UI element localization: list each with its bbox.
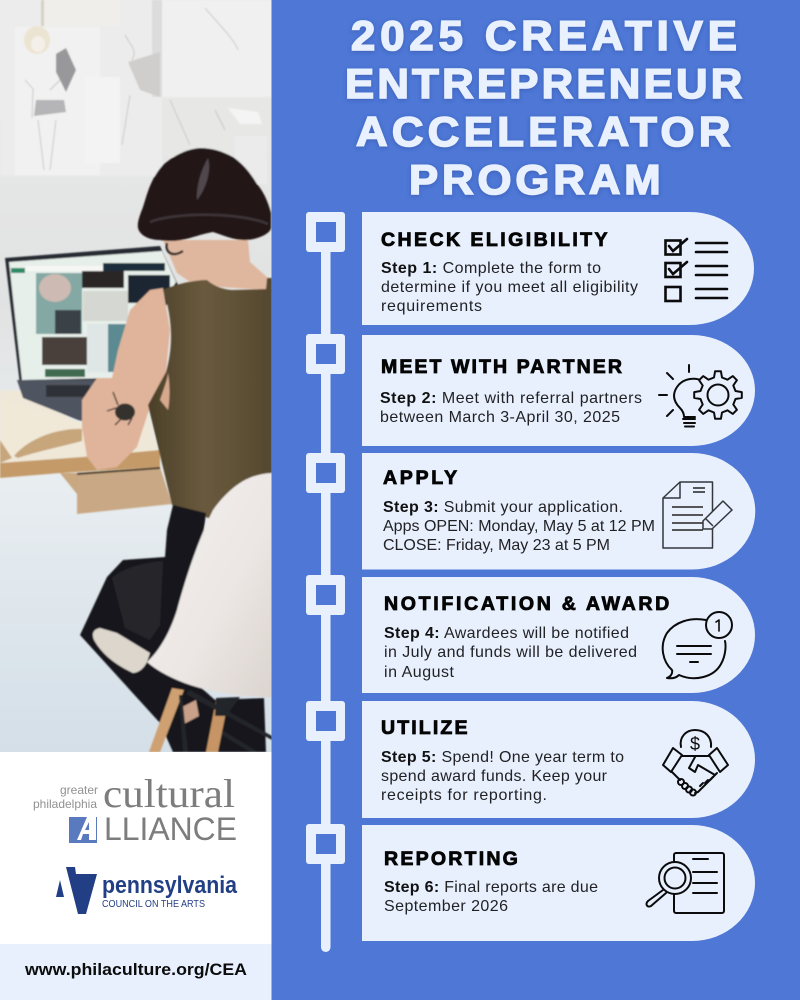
hair xyxy=(138,148,271,241)
panel: step 2 meet with partner: between March 3-April 30, 2025 xyxy=(380,409,620,426)
icon: handshake with dollar coin: $ xyxy=(690,734,700,754)
panel: step 1 check eligibility xyxy=(362,212,754,325)
website footer: www.philaculture.org/CEA xyxy=(24,960,247,979)
trousers xyxy=(80,505,266,752)
logo: Greater Philadelphia Cultural Alliance: philadelphia xyxy=(33,797,97,811)
website footer xyxy=(0,944,272,1000)
ankle skin xyxy=(180,700,199,724)
panel: step 2 meet with partner xyxy=(362,335,755,446)
logo: Pennsylvania Council on the Arts xyxy=(56,867,238,914)
arm and shoulder xyxy=(82,288,170,470)
title: ENTREPRENEUR xyxy=(345,61,742,108)
panel: step 1 check eligibility: CHECK ELIGIBILITY xyxy=(381,230,608,251)
panel: step 4 notification and award: in July and funds will be delivered xyxy=(384,644,637,661)
logo: Pennsylvania Council on the Arts: COUNCIL ON THE ARTS xyxy=(102,898,205,910)
pencil sketches xyxy=(25,8,238,170)
panel: step 4 notification and award xyxy=(362,577,755,693)
panel: step 2 meet with partner: MEET WITH PARTNER xyxy=(381,357,622,378)
logo: Pennsylvania Council on the Arts: pennsylvania xyxy=(102,872,238,899)
blue background panel xyxy=(272,0,800,1000)
panel: step 1 check eligibility: Step 1: Complete the form to xyxy=(381,260,601,277)
desk surface xyxy=(0,390,158,470)
chair shell xyxy=(147,473,272,697)
panel: step 4 notification and award: NOTIFICATION & AWARD xyxy=(384,594,669,615)
logo panel xyxy=(0,752,272,944)
icon: document and pencil xyxy=(663,482,732,548)
icon: handshake with dollar coin xyxy=(663,730,728,796)
panel: step 5 utilize: Step 5: Spend! One year term to xyxy=(381,749,624,766)
logo: Greater Philadelphia Cultural Alliance xyxy=(33,771,237,847)
panel: step 3 apply: APPLY xyxy=(383,468,457,489)
logo: Greater Philadelphia Cultural Alliance: LLIANCE xyxy=(104,811,237,847)
title: 2025 CREATIVE xyxy=(351,13,737,60)
tattoo xyxy=(115,404,135,420)
chair legs xyxy=(149,688,184,752)
panel: step 4 notification and award: Step 4: Awardees will be notified xyxy=(384,625,629,642)
panel: step 4 notification and award: in August xyxy=(384,664,455,681)
panel: step 3 apply: Step 3: Submit your application. xyxy=(383,499,623,516)
photo: artist working at laptop xyxy=(0,0,272,752)
open book xyxy=(78,422,82,424)
title: PROGRAM xyxy=(409,157,661,204)
panel: step 5 utilize: spend award funds. Keep your xyxy=(381,768,608,785)
panel: step 2 meet with partner: Step 2: Meet with referral partners xyxy=(380,390,642,407)
laptop lid and screen xyxy=(5,246,178,385)
icon: light bulb and gear xyxy=(659,365,742,426)
laptop base xyxy=(16,379,96,422)
panel: step 6 reporting: September 2026 xyxy=(384,898,508,915)
sketch papers on the wall xyxy=(153,164,164,178)
wooden desk edge and drawer xyxy=(0,450,160,478)
panel: step 1 check eligibility: requirements xyxy=(381,298,482,315)
panel: step 3 apply xyxy=(362,453,755,570)
title xyxy=(345,13,742,204)
logo: Greater Philadelphia Cultural Alliance: cultural xyxy=(103,771,235,816)
panel: step 5 utilize: receipts for reporting. xyxy=(381,787,547,804)
panel: step 6 reporting: Step 6: Final reports are due xyxy=(384,879,598,896)
icon: chat bubble with notification xyxy=(663,612,732,678)
panel: step 6 reporting xyxy=(362,825,755,941)
icon: magnifying glass over report xyxy=(647,853,724,913)
logo: Greater Philadelphia Cultural Alliance: greater xyxy=(60,783,98,797)
title: ACCELERATOR xyxy=(356,109,730,156)
icon: checklist xyxy=(666,239,727,301)
panel: step 3 apply: Apps OPEN: Monday, May 5 at 12 PM xyxy=(383,518,655,535)
panel: step 5 utilize xyxy=(362,701,755,818)
panel: step 6 reporting: REPORTING xyxy=(384,849,518,870)
panel: step 1 check eligibility: determine if you meet all eligibility xyxy=(381,279,638,296)
tank top xyxy=(148,278,272,520)
neck tattoo xyxy=(167,243,183,254)
panel: step 5 utilize: UTILIZE xyxy=(381,718,468,739)
panel: step 3 apply: CLOSE: Friday, May 23 at 5 PM xyxy=(383,537,610,554)
neck xyxy=(163,240,268,290)
timeline xyxy=(306,212,345,952)
